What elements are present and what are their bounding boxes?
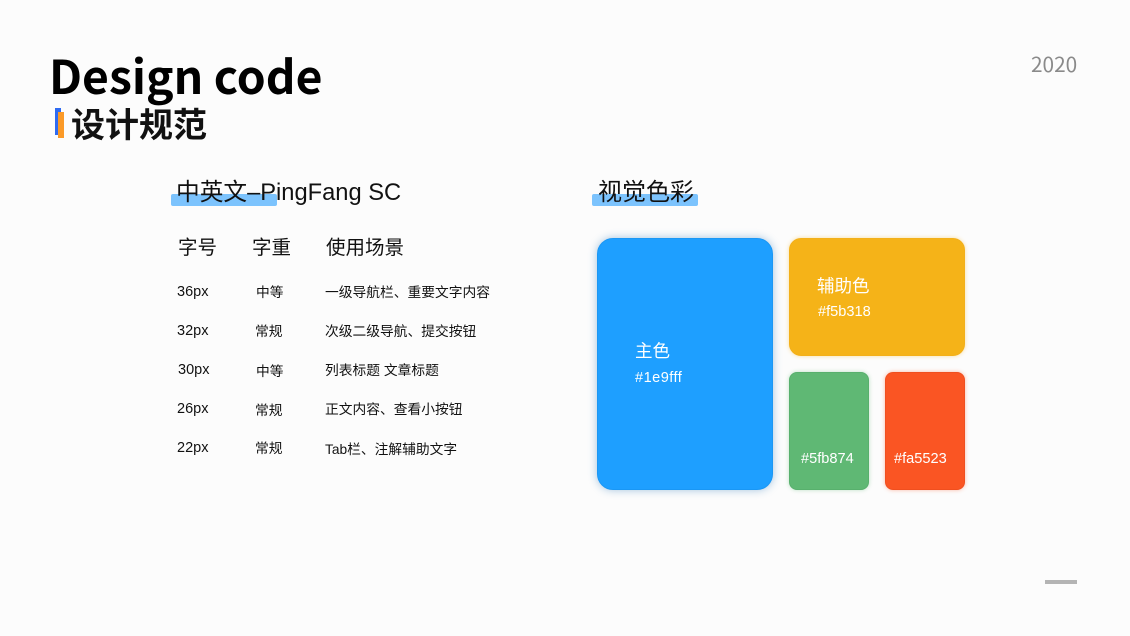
panel: typography bbox=[171, 180, 490, 457]
panel: typography: 30px bbox=[178, 362, 209, 378]
icon: orange accent bar bbox=[58, 112, 64, 138]
red-orange hex: #fa5523 bbox=[894, 451, 947, 467]
icon: blue accent bar bbox=[55, 108, 61, 135]
panel: typography: Tab栏、注解辅助文字 bbox=[325, 442, 457, 457]
card: primary colour bbox=[597, 238, 773, 490]
heading highlight bbox=[592, 194, 698, 206]
heading highlight bbox=[171, 194, 277, 206]
panel: typography: 列表标题 文章标题 bbox=[325, 363, 439, 378]
panel: typography: 32px bbox=[177, 323, 208, 339]
title: Design code bbox=[49, 41, 322, 108]
panel: typography: 常规 bbox=[255, 403, 283, 418]
panel: typography: 常规 bbox=[255, 324, 283, 339]
year label: 2020 bbox=[1031, 48, 1077, 78]
subtitle with accent bbox=[55, 98, 207, 147]
row: 30px bbox=[178, 362, 439, 379]
panel: typography: 26px bbox=[177, 401, 208, 417]
card: green bbox=[789, 372, 869, 490]
row: 26px bbox=[177, 401, 463, 418]
primary label: 主色 bbox=[635, 341, 670, 361]
secondary hex: #f5b318 bbox=[818, 304, 871, 320]
panel: colours bbox=[592, 179, 968, 496]
panel: typography: 36px bbox=[177, 284, 208, 300]
panel: typography: 中等 bbox=[256, 364, 284, 379]
heading: typeface: 中英文–PingFang SC bbox=[176, 180, 401, 206]
subtitle text: 设计规范 bbox=[71, 98, 207, 147]
page indicator bbox=[1045, 580, 1077, 584]
primary hex: #1e9fff bbox=[635, 370, 682, 386]
panel: typography: 正文内容、查看小按钮 bbox=[325, 402, 463, 417]
panel: typography: 次级二级导航、提交按钮 bbox=[325, 324, 476, 339]
column header: usage: 使用场景 bbox=[326, 237, 404, 259]
secondary label: 辅助色 bbox=[817, 276, 870, 296]
panel: typography: 常规 bbox=[255, 441, 283, 456]
row: 36px bbox=[177, 284, 490, 300]
column header: weight: 字重 bbox=[252, 237, 291, 259]
panel: typography: 一级导航栏、重要文字内容 bbox=[325, 285, 490, 300]
heading: visual colours: 视觉色彩 bbox=[598, 179, 694, 206]
panel: typography: 22px bbox=[177, 440, 208, 456]
panel: typography: 中等 bbox=[256, 285, 284, 300]
column header: size: 字号 bbox=[178, 237, 217, 259]
row: 32px bbox=[177, 323, 476, 339]
card: red-orange bbox=[885, 372, 965, 490]
card: secondary colour bbox=[789, 238, 965, 356]
row: 22px bbox=[177, 440, 457, 457]
green hex: #5fb874 bbox=[801, 451, 854, 467]
